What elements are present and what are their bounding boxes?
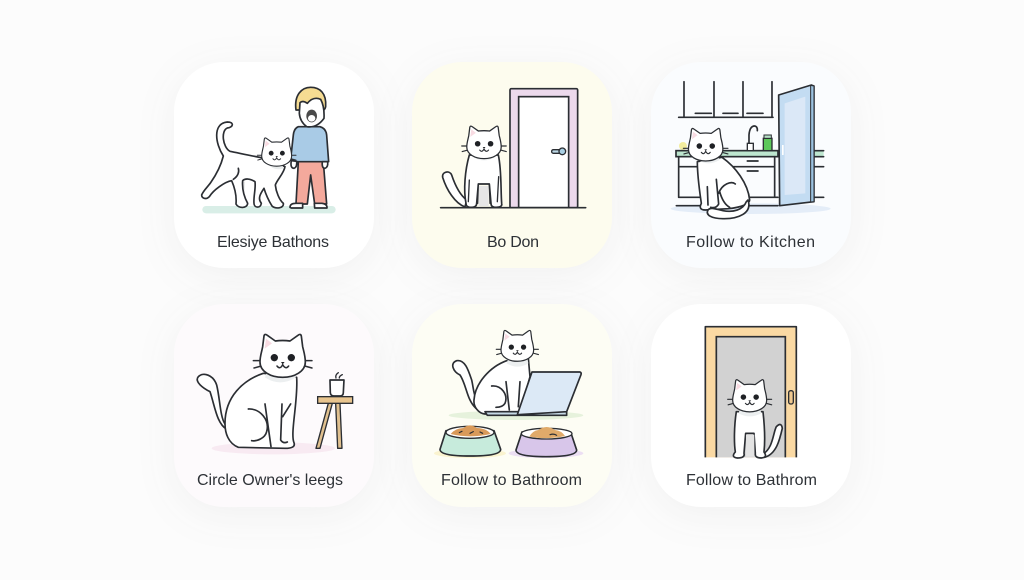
panel: card 5 laptop and bowls [412,304,612,507]
label: Follow to Bathroom [441,472,582,489]
food bowl: mint [434,425,506,458]
panel: card 3 kitchen [651,62,851,268]
side table with cup [316,373,353,448]
illustration: cat at the door [441,89,586,208]
panel: card 6 bathroom door [651,304,851,507]
label: Bo Don [487,234,539,251]
panel: card 2 door [412,62,612,268]
label: Follow to Kitchen [686,234,815,251]
illustration: cat, laptop and food bowls [434,330,583,458]
owner figure [290,87,329,208]
label: Follow to Bathrom [686,472,817,489]
panel: card 1 owner and cat [174,62,374,268]
illustration: cat walking beside owner [202,87,336,213]
food bowl: lilac [509,427,583,458]
illustration: cat and side table [197,334,353,454]
label: Elesiye Bathons [217,234,329,251]
label: Circle Owner's leegs [197,472,343,489]
panel: card 4 circle [174,304,374,507]
illustration: cat in the kitchen [671,82,831,219]
illustration: cat in doorway [705,327,796,458]
